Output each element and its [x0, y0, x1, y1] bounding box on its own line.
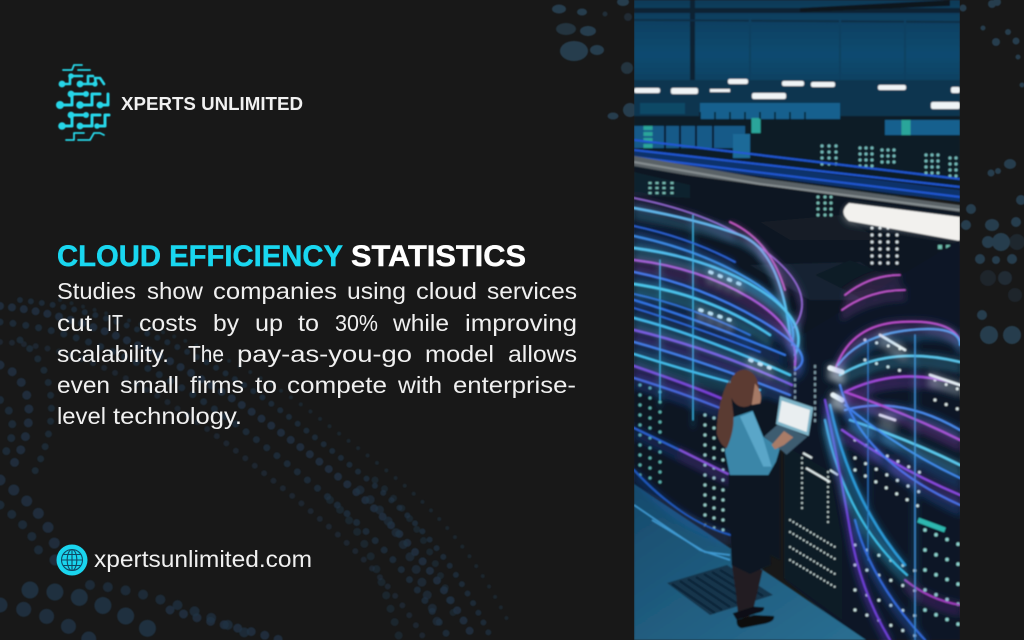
body text: firms — [190, 372, 244, 398]
body text: to — [255, 372, 277, 398]
skirt — [728, 472, 771, 574]
body text: costs — [139, 310, 197, 336]
decorative dots right strip — [960, 0, 1024, 344]
body text: small — [120, 372, 179, 398]
body text: model — [425, 341, 494, 367]
logo wordmark: XPERTS UNLIMITED — [121, 94, 303, 114]
website text: xpertsunlimited.com — [94, 546, 312, 572]
heading: STATISTICS — [351, 240, 526, 273]
photo: data centre with woman and laptop — [634, 0, 960, 640]
heading — [57, 240, 526, 273]
body text: while — [392, 310, 449, 336]
white light tube — [843, 203, 960, 241]
ponytail and hair — [717, 380, 734, 448]
blue light band and grey rail — [634, 140, 960, 214]
ceiling and back wall — [634, 0, 960, 128]
body text: up — [255, 310, 283, 336]
light trail glow — [634, 198, 960, 640]
left wall racks — [634, 200, 780, 560]
hand — [772, 431, 793, 449]
background dot wave pattern — [0, 300, 510, 640]
laptop — [764, 424, 807, 455]
body text: even — [57, 372, 110, 398]
legs and shoes — [732, 563, 763, 618]
body text: IT — [107, 310, 123, 336]
decorative dots top centre — [552, 0, 637, 120]
light trails right — [825, 275, 960, 640]
light trails left — [634, 198, 802, 535]
mid dark racks — [634, 176, 960, 398]
body text: The — [188, 341, 224, 367]
body text: services — [487, 278, 577, 304]
body text: companies — [213, 278, 337, 304]
centre and right racks — [784, 240, 960, 640]
floor with vent — [634, 484, 866, 640]
ceiling lights — [634, 79, 960, 109]
body text: improving — [465, 310, 577, 336]
logo — [56, 65, 303, 140]
body text: compete — [287, 372, 387, 398]
body text: using — [347, 278, 406, 304]
body text: 30% — [335, 310, 378, 336]
body text: by — [213, 310, 240, 336]
shirt — [725, 411, 780, 475]
body text: technology. — [113, 403, 242, 429]
body text: level — [57, 403, 106, 429]
body text: cut — [57, 310, 93, 336]
woman — [717, 370, 813, 628]
body text: Studies — [57, 278, 136, 304]
body text: cloud — [416, 278, 477, 304]
body text: enterprise- — [453, 372, 576, 398]
heading: CLOUD EFFICIENCY — [57, 240, 343, 273]
icon: globe — [56, 544, 88, 576]
body text: scalability. — [57, 341, 169, 367]
far server rows — [634, 103, 960, 196]
body text: allows — [508, 341, 577, 367]
website link — [56, 544, 312, 576]
logo icon: circuit globe — [56, 65, 109, 140]
body text — [57, 278, 577, 429]
body text: show — [147, 278, 203, 304]
body text: with — [397, 372, 442, 398]
body text: to — [298, 310, 319, 336]
body text: pay-as-you-go — [237, 341, 412, 367]
